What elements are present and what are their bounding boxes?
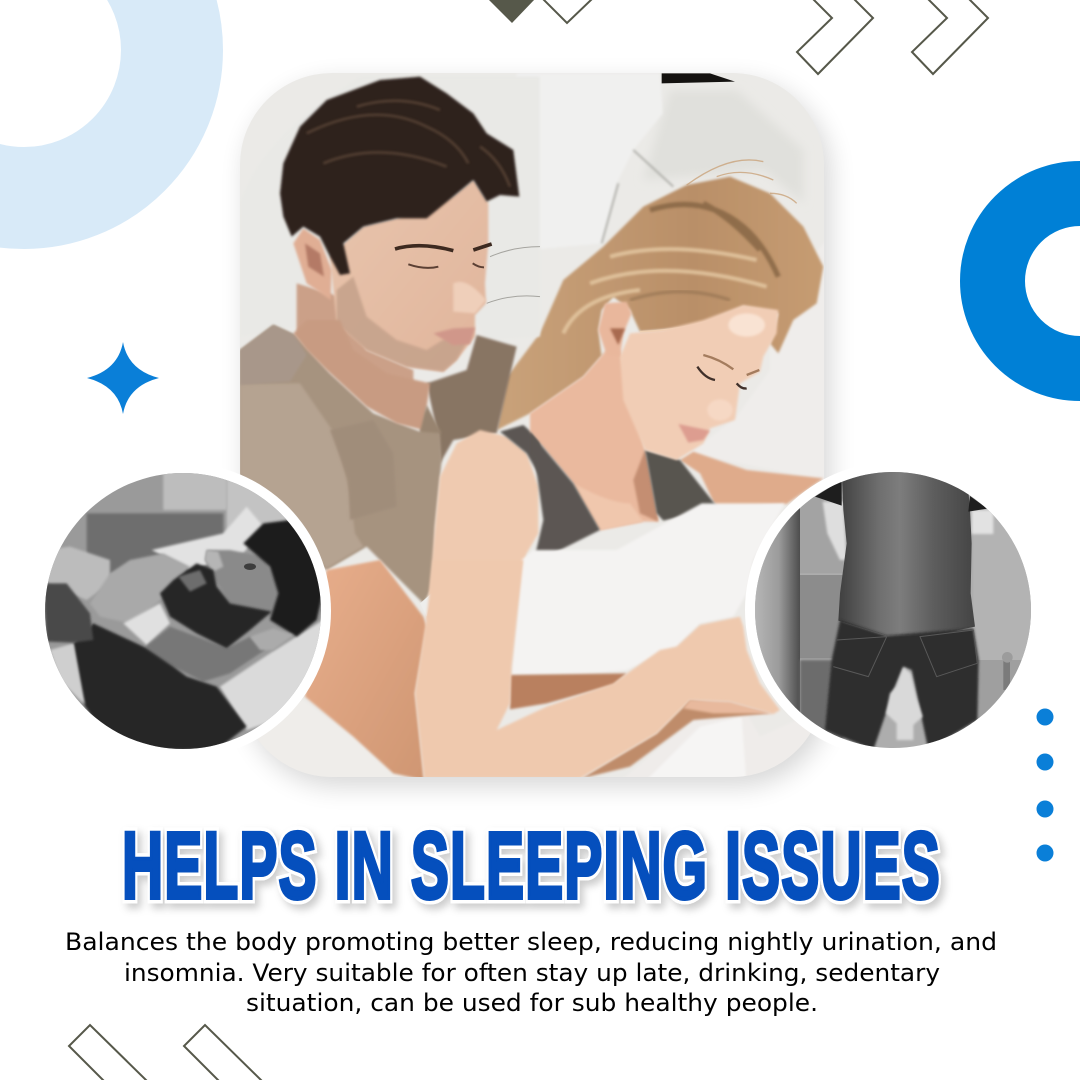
tiled wall left xyxy=(800,497,847,573)
jeans pockets xyxy=(833,630,977,677)
face xyxy=(620,305,778,460)
t-shirt xyxy=(838,470,975,636)
icon: four-point star xyxy=(87,342,159,414)
man shirt, arm, woman upper arm xyxy=(240,320,540,620)
lips xyxy=(678,424,710,443)
decorative ring: light blue top-left xyxy=(0,0,172,198)
man beard xyxy=(160,563,272,648)
undershirt sleeve xyxy=(50,643,85,705)
pipe xyxy=(1003,660,1010,690)
jeans xyxy=(825,620,979,750)
man hand xyxy=(43,583,93,643)
photo shadow xyxy=(246,82,830,786)
man neck xyxy=(142,627,265,682)
woman blanket xyxy=(47,547,110,600)
neck xyxy=(295,282,415,381)
man hair xyxy=(243,520,323,637)
brows xyxy=(703,355,759,375)
woman hair xyxy=(497,177,823,430)
description text xyxy=(65,928,997,1017)
left sheet xyxy=(240,667,427,783)
lips xyxy=(433,327,475,345)
decorative chevrons top right xyxy=(797,0,988,74)
main photo: couple sleeping xyxy=(240,70,837,787)
sleeve xyxy=(240,383,363,568)
grey strap xyxy=(500,425,540,477)
description text: Balances the body promoting better sleep, reducing nightly urination, and xyxy=(65,928,997,956)
decorative chevrons bottom left xyxy=(69,1025,262,1080)
hair xyxy=(280,77,519,275)
pillow right of woman face xyxy=(690,237,830,537)
description text: situation, can be used for sub healthy people. xyxy=(246,989,818,1017)
man arm xyxy=(305,560,427,780)
man ear xyxy=(250,628,293,650)
closed eyes xyxy=(408,263,484,268)
title outline and shadow: HELPS IN SLEEPING ISSUES xyxy=(122,812,940,919)
man face xyxy=(205,550,282,617)
door panel xyxy=(753,470,800,753)
neck low part xyxy=(293,320,430,430)
white sheet xyxy=(123,603,170,645)
collar xyxy=(419,405,438,433)
pillow under man xyxy=(220,620,323,730)
decorative diamonds top centre xyxy=(488,0,592,23)
decorative dots xyxy=(1036,708,1054,862)
grey top xyxy=(530,432,600,556)
decorative ring: blue right xyxy=(992,194,1080,368)
man forearm under xyxy=(510,673,627,709)
sleeves xyxy=(815,480,987,512)
white pillow xyxy=(420,594,430,616)
right sheet xyxy=(613,703,833,787)
description text: insomnia. Very suitable for often stay up late, drinking, sedentary xyxy=(124,959,940,987)
shirt body xyxy=(240,325,442,603)
ear xyxy=(598,302,632,357)
woman upper arm xyxy=(427,430,538,620)
man shirt xyxy=(73,623,247,750)
woman head xyxy=(90,553,190,623)
arms xyxy=(823,502,847,560)
brows xyxy=(395,244,492,251)
ear xyxy=(293,228,332,300)
far shoulder xyxy=(427,335,517,463)
right wall xyxy=(973,510,1037,753)
background furniture xyxy=(87,513,223,573)
woman arm and hand xyxy=(415,560,780,778)
left circle: man awake in bed xyxy=(35,463,331,759)
closed eyes xyxy=(697,367,747,388)
right circle: man at urinal xyxy=(745,462,1041,758)
neck and chest xyxy=(530,350,658,530)
face xyxy=(330,180,488,372)
bottom: arms, pillow, sheets xyxy=(240,503,833,787)
title: HELPS IN SLEEPING ISSUES xyxy=(122,812,940,919)
pillow behind xyxy=(152,507,263,570)
woman chest, top and face xyxy=(530,302,823,556)
man eye xyxy=(244,563,256,570)
bed and pillows top right xyxy=(497,73,824,431)
urinal xyxy=(886,667,923,740)
far arm xyxy=(680,452,823,508)
man hair and head xyxy=(278,74,542,381)
